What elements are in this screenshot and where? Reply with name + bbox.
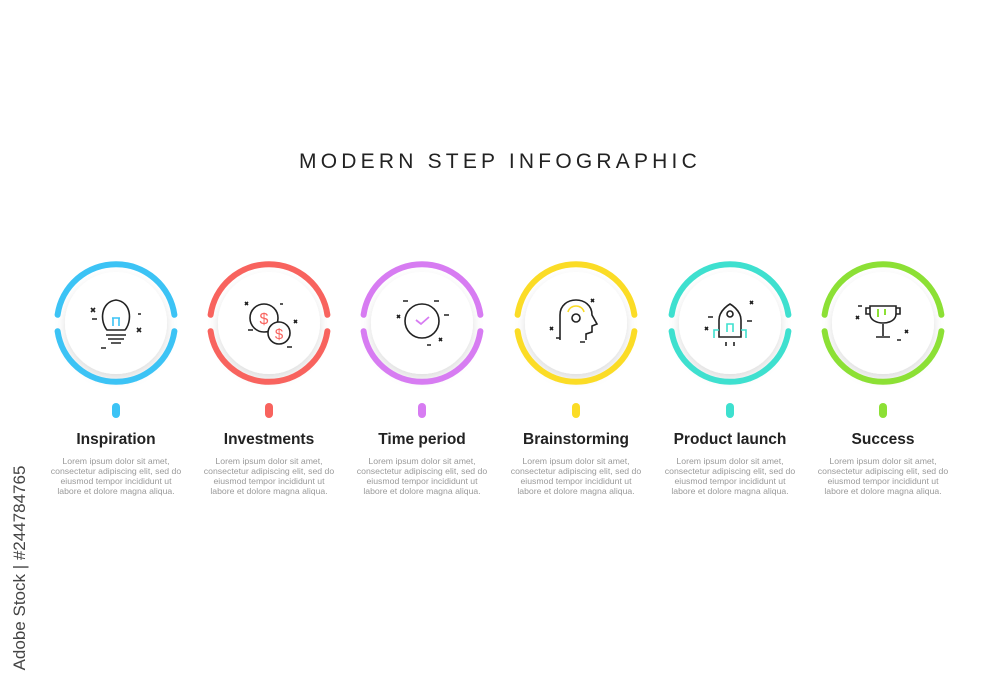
text: Product launch bbox=[665, 456, 795, 496]
label: Success: Success bbox=[852, 431, 914, 448]
label: Inspiration: Inspiration bbox=[76, 431, 156, 448]
text: Inspiration: eiusmod tempor incididunt ut bbox=[60, 476, 172, 486]
step 3 bbox=[364, 264, 480, 418]
step 5 bbox=[672, 264, 788, 418]
text: Investments: Lorem ipsum dolor sit amet, bbox=[215, 456, 323, 466]
text: Success bbox=[818, 456, 948, 496]
step 6 bbox=[825, 264, 941, 418]
step 2: $ bbox=[275, 326, 284, 343]
step 4 bbox=[518, 264, 634, 418]
text: Brainstorming: labore et dolore magna aliqua. bbox=[517, 486, 635, 496]
text: Product launch: consectetur adipiscing elit, sed do bbox=[665, 466, 795, 476]
label: Product launch: Product launch bbox=[674, 431, 786, 448]
step 2 bbox=[211, 264, 327, 418]
text: Inspiration bbox=[51, 456, 181, 496]
text: Inspiration: consectetur adipiscing elit, sed do bbox=[51, 466, 181, 476]
text: Product launch: Lorem ipsum dolor sit amet, bbox=[676, 456, 784, 466]
text: Brainstorming: Lorem ipsum dolor sit amet, bbox=[522, 456, 630, 466]
watermark: Adobe Stock | #244784765 bbox=[10, 466, 29, 670]
text: Time period bbox=[357, 456, 487, 496]
text: Inspiration: Lorem ipsum dolor sit amet, bbox=[62, 456, 170, 466]
step 1 bbox=[58, 264, 174, 418]
text: Product launch: labore et dolore magna aliqua. bbox=[671, 486, 789, 496]
step 2: $ bbox=[260, 311, 269, 328]
text: Success: Lorem ipsum dolor sit amet, bbox=[829, 456, 937, 466]
text: Brainstorming: consectetur adipiscing elit, sed do bbox=[511, 466, 641, 476]
text: Time period: eiusmod tempor incididunt ut bbox=[366, 476, 478, 486]
text: Investments: labore et dolore magna aliqua. bbox=[210, 486, 328, 496]
text: Investments: eiusmod tempor incididunt ut bbox=[213, 476, 325, 486]
icon: rocket bbox=[705, 301, 753, 346]
text: Product launch: eiusmod tempor incididunt ut bbox=[674, 476, 786, 486]
text: Time period: labore et dolore magna aliqua. bbox=[363, 486, 481, 496]
text: Success: labore et dolore magna aliqua. bbox=[824, 486, 942, 496]
icon: trophy bbox=[856, 306, 908, 340]
label: Time period: Time period bbox=[378, 431, 466, 448]
icon: clock bbox=[397, 301, 449, 345]
label: Brainstorming: Brainstorming bbox=[523, 431, 629, 448]
text: Time period: consectetur adipiscing elit, sed do bbox=[357, 466, 487, 476]
label: Investments: Investments bbox=[224, 431, 314, 448]
icon: head with gear bbox=[550, 299, 597, 342]
icon: bulb bbox=[91, 300, 141, 348]
text: Success: consectetur adipiscing elit, sed do bbox=[818, 466, 948, 476]
text: Investments: consectetur adipiscing elit, sed do bbox=[204, 466, 334, 476]
text: Investments bbox=[204, 456, 334, 496]
text: Success: eiusmod tempor incididunt ut bbox=[827, 476, 939, 486]
title: MODERN STEP INFOGRAPHIC bbox=[299, 150, 701, 173]
text: Brainstorming bbox=[511, 456, 641, 496]
text: Inspiration: labore et dolore magna aliqua. bbox=[57, 486, 175, 496]
text: Time period: Lorem ipsum dolor sit amet, bbox=[368, 456, 476, 466]
icon: coins bbox=[245, 302, 297, 347]
text: Brainstorming: eiusmod tempor incididunt ut bbox=[520, 476, 632, 486]
